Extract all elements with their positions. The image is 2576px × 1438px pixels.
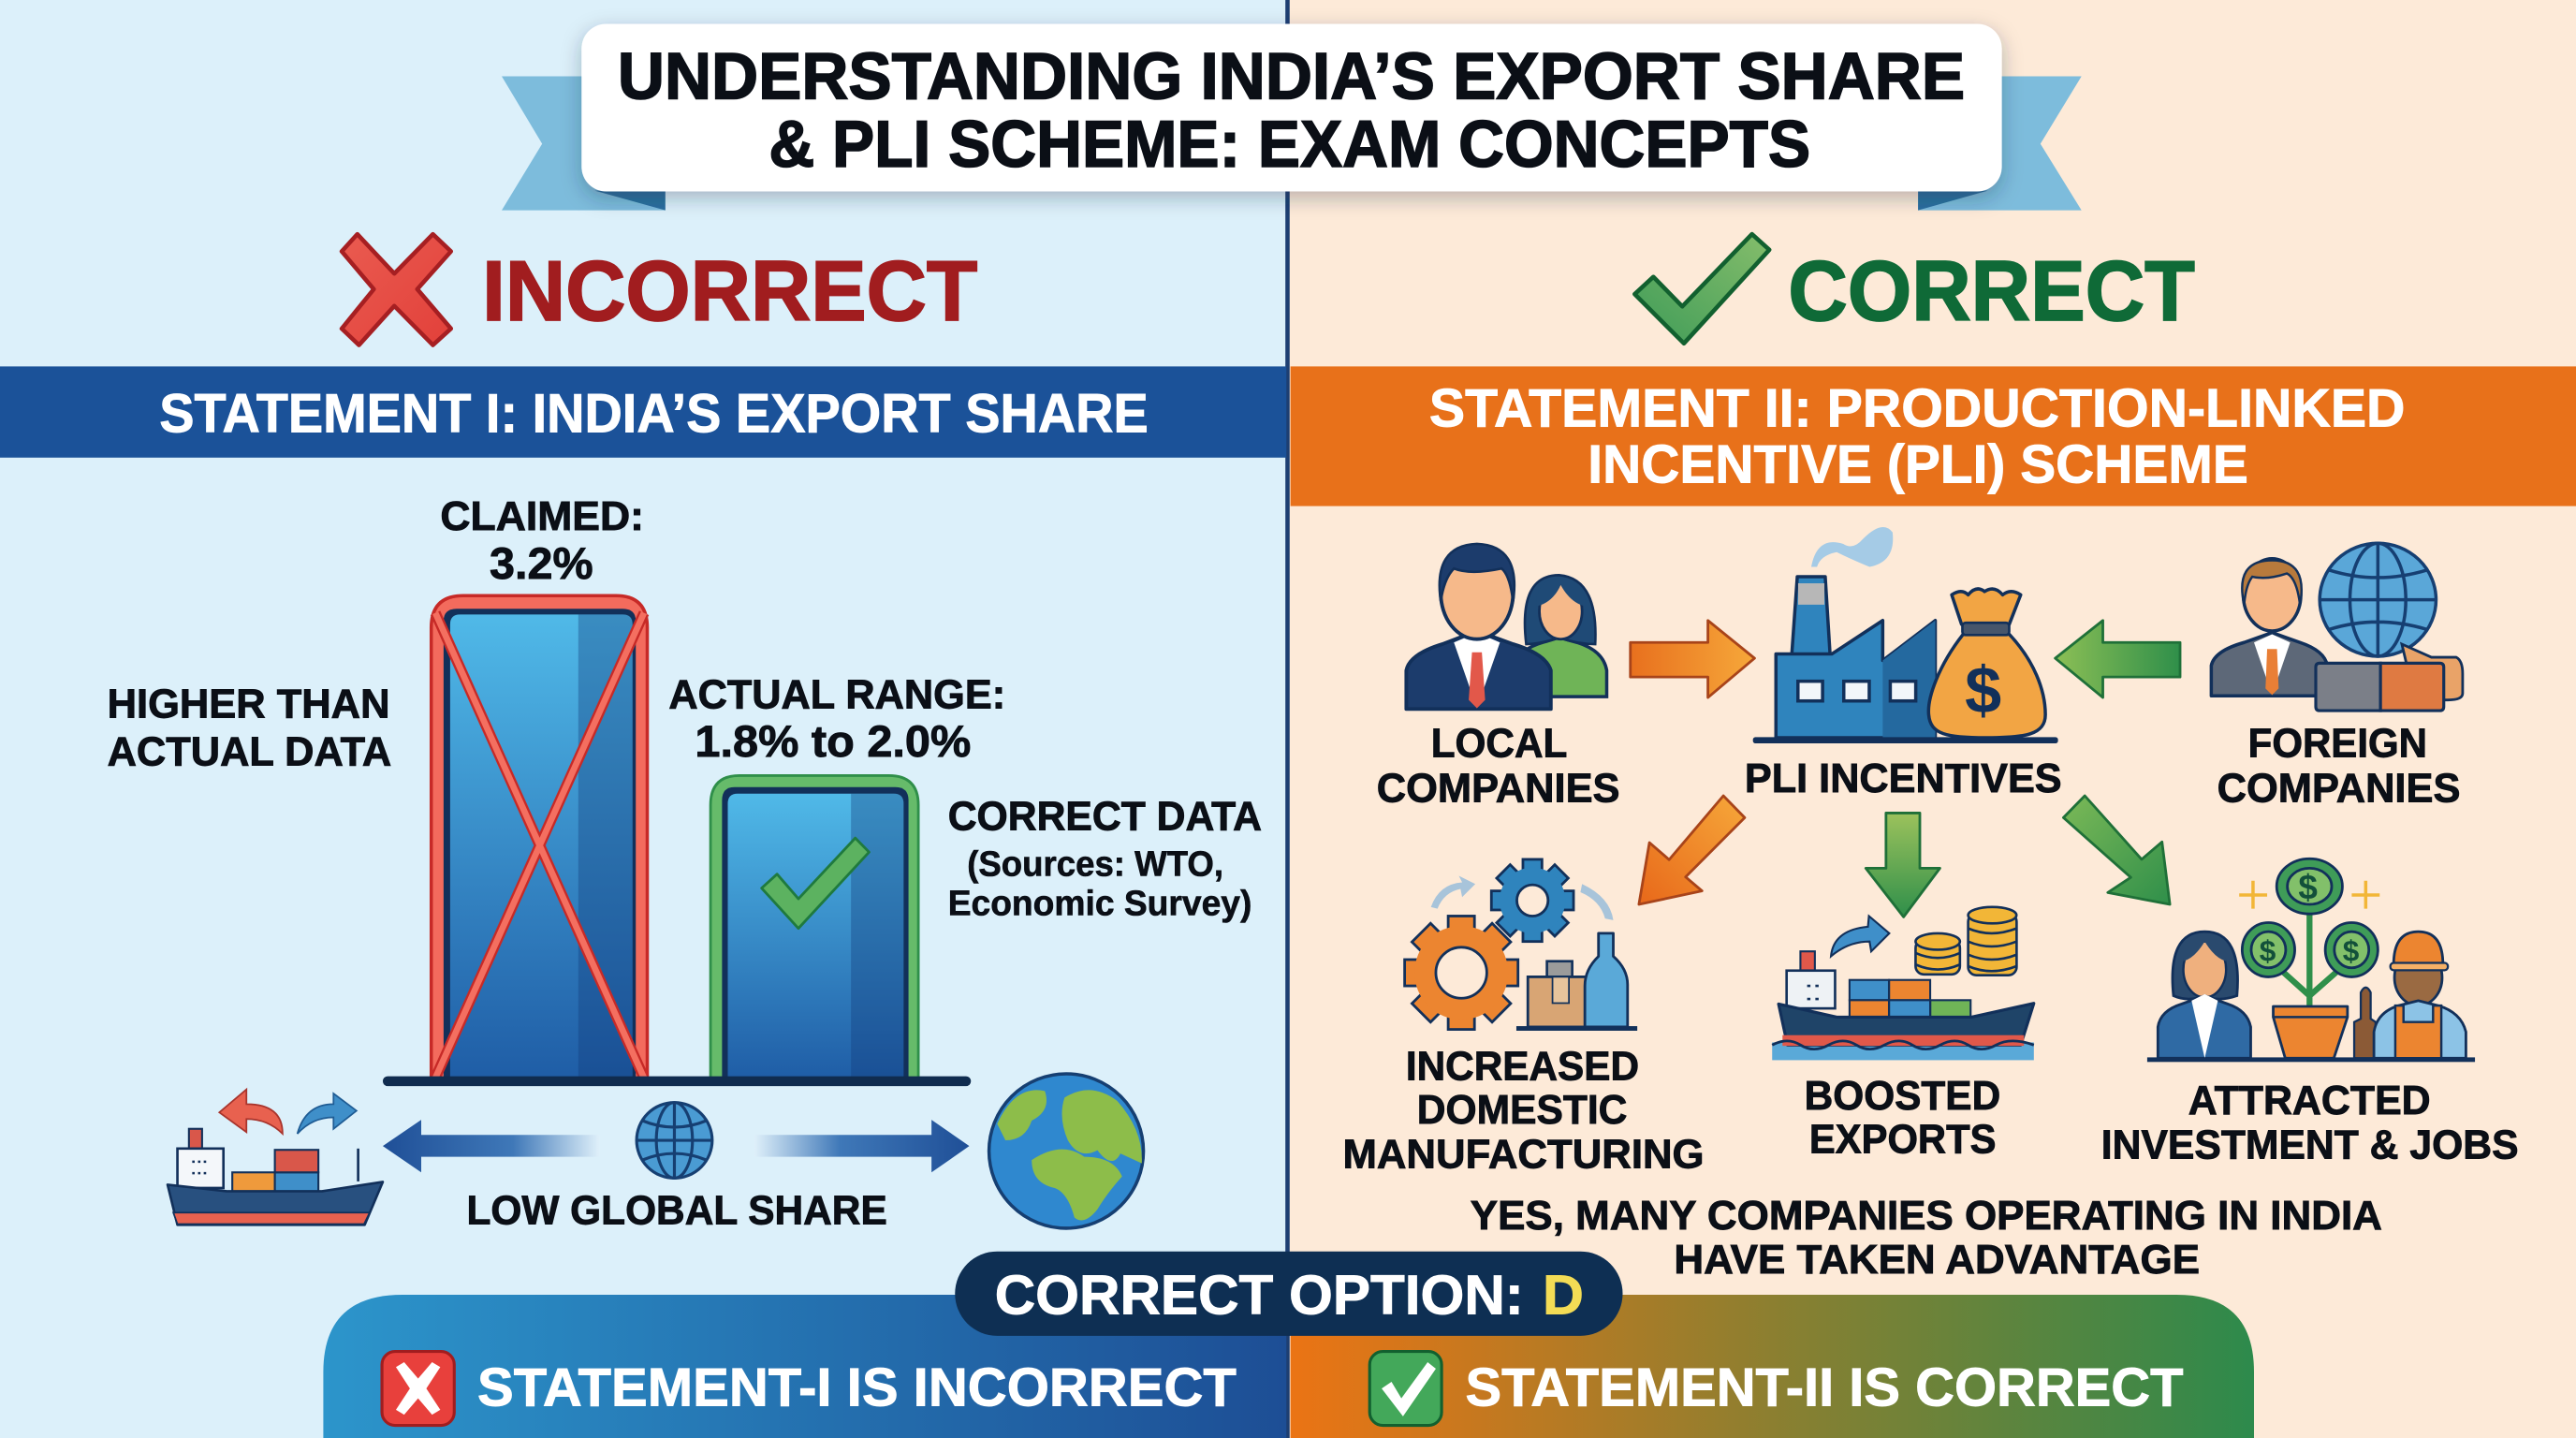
note: companies taken advantage: YES, MANY COMPANIES OPERATING IN INDIA bbox=[1471, 1193, 2382, 1239]
verdict: incorrect bbox=[342, 234, 977, 345]
label: local companies bbox=[1377, 720, 1620, 811]
icon: green check bbox=[1634, 234, 1769, 344]
bar: actual range bbox=[710, 775, 918, 1079]
icon: local companies people bbox=[1406, 544, 1606, 709]
heading: statement II bbox=[1291, 366, 2576, 506]
verdict: incorrect: INCORRECT bbox=[482, 243, 977, 339]
conclusion: statement I is incorrect: STATEMENT-I IS INCORRECT bbox=[477, 1358, 1237, 1418]
icon: money plant and workers: $ bbox=[2260, 934, 2276, 968]
label: attracted investment and jobs bbox=[2101, 1078, 2519, 1167]
icon: red cross badge bbox=[382, 1352, 454, 1426]
icon: factory and money bag bbox=[1753, 527, 2058, 743]
arrow: local companies to PLI bbox=[1631, 621, 1754, 697]
note: correct data sources: (Sources: WTO, bbox=[967, 844, 1223, 883]
arrow: to manufacturing bbox=[1639, 796, 1745, 904]
bar label: claimed bbox=[440, 493, 644, 589]
verdict: correct bbox=[1634, 234, 2195, 344]
icon: gears and products bbox=[1405, 859, 1637, 1031]
note: correct data sources: CORRECT DATA bbox=[948, 793, 1262, 839]
arrow: to exports bbox=[1866, 813, 1939, 917]
heading: statement I: STATEMENT I: INDIA’S EXPORT SHARE bbox=[159, 384, 1149, 445]
callout: correct option D bbox=[955, 1252, 1623, 1336]
title text: UNDERSTANDING INDIA’S EXPORT SHARE bbox=[618, 38, 1965, 112]
note: companies taken advantage: HAVE TAKEN ADVANTAGE bbox=[1674, 1237, 2200, 1283]
note: higher than actual bbox=[108, 681, 391, 774]
icon: factory and money bag: $ bbox=[1965, 653, 2001, 727]
bar label: actual range: ACTUAL RANGE: bbox=[668, 671, 1005, 717]
panel: PLI scheme flow bbox=[1342, 527, 2519, 1283]
icon: earth globe bbox=[989, 1074, 1144, 1228]
note: higher than actual: HIGHER THAN bbox=[108, 681, 389, 726]
icon: export ship and coins bbox=[1772, 907, 2034, 1060]
bar label: claimed: 3.2% bbox=[490, 539, 593, 589]
label: local companies: COMPANIES bbox=[1377, 765, 1620, 811]
icon: small globe bbox=[637, 1103, 712, 1178]
bar: claimed 3.2% crossed out bbox=[432, 595, 648, 1079]
label: local companies: LOCAL bbox=[1431, 720, 1567, 766]
heading: statement I bbox=[0, 366, 1286, 458]
conclusion: statement II is correct bbox=[1291, 1295, 2254, 1438]
icon: green check badge bbox=[1369, 1352, 1442, 1426]
icon: red cross bbox=[342, 234, 451, 345]
icon: foreign company and globe bbox=[2211, 543, 2463, 711]
label: attracted investment and jobs: INVESTMENT & JOBS bbox=[2101, 1122, 2519, 1167]
icon: cargo ship with trade arrows bbox=[168, 1090, 383, 1225]
icon: money plant and workers: $ bbox=[2298, 868, 2318, 906]
label: boosted exports: BOOSTED bbox=[1805, 1073, 2000, 1119]
heading: statement II: INCENTIVE (PLI) SCHEME bbox=[1588, 434, 2248, 494]
label: boosted exports: EXPORTS bbox=[1809, 1117, 1996, 1163]
icon: check on bar bbox=[762, 838, 869, 929]
title banner bbox=[502, 23, 2082, 211]
arrows: low global share bbox=[383, 1120, 970, 1172]
callout: correct option D: CORRECT OPTION: bbox=[995, 1263, 1524, 1326]
label: increased domestic manufacturing: DOMESTIC bbox=[1417, 1087, 1627, 1133]
conclusion: statement II is correct: STATEMENT-II IS CORRECT bbox=[1466, 1358, 2184, 1418]
label: low global share: LOW GLOBAL SHARE bbox=[466, 1188, 887, 1234]
bar label: actual range bbox=[668, 671, 1005, 767]
label: increased domestic manufacturing bbox=[1342, 1043, 1705, 1178]
verdict: correct: CORRECT bbox=[1788, 243, 2195, 339]
label: attracted investment and jobs: ATTRACTED bbox=[2188, 1078, 2431, 1123]
label: foreign companies: COMPANIES bbox=[2217, 765, 2460, 811]
title banner: & PLI SCHEME: EXAM CONCEPTS bbox=[768, 107, 1810, 181]
note: companies taken advantage bbox=[1471, 1193, 2382, 1283]
background: right panel bbox=[1288, 0, 2576, 1438]
label: increased domestic manufacturing: MANUFACTURING bbox=[1342, 1132, 1705, 1178]
heading: statement II: STATEMENT II: PRODUCTION-LINKED bbox=[1429, 378, 2405, 438]
label: boosted exports bbox=[1805, 1073, 2000, 1163]
icon: money plant and workers bbox=[2147, 858, 2475, 1062]
note: correct data sources bbox=[948, 793, 1262, 923]
label: foreign companies bbox=[2217, 720, 2460, 811]
background: left panel bbox=[0, 0, 1288, 1438]
bar label: actual range: 1.8% to 2.0% bbox=[695, 717, 971, 767]
panel: export share chart bbox=[108, 493, 1262, 1234]
icon: money plant and workers: $ bbox=[2343, 934, 2360, 968]
label: increased domestic manufacturing: INCREASED bbox=[1406, 1043, 1639, 1089]
label: foreign companies: FOREIGN bbox=[2248, 720, 2427, 766]
bar label: claimed: CLAIMED: bbox=[440, 493, 644, 539]
arrow: foreign companies to PLI bbox=[2056, 621, 2180, 697]
conclusion: statement I is incorrect bbox=[323, 1295, 1286, 1438]
arrow: to investment and jobs bbox=[2063, 796, 2170, 904]
note: correct data sources: Economic Survey) bbox=[948, 884, 1251, 923]
callout: correct option D: D bbox=[1543, 1263, 1584, 1326]
label: PLI incentives: PLI INCENTIVES bbox=[1745, 756, 2062, 801]
note: higher than actual: ACTUAL DATA bbox=[108, 728, 391, 774]
